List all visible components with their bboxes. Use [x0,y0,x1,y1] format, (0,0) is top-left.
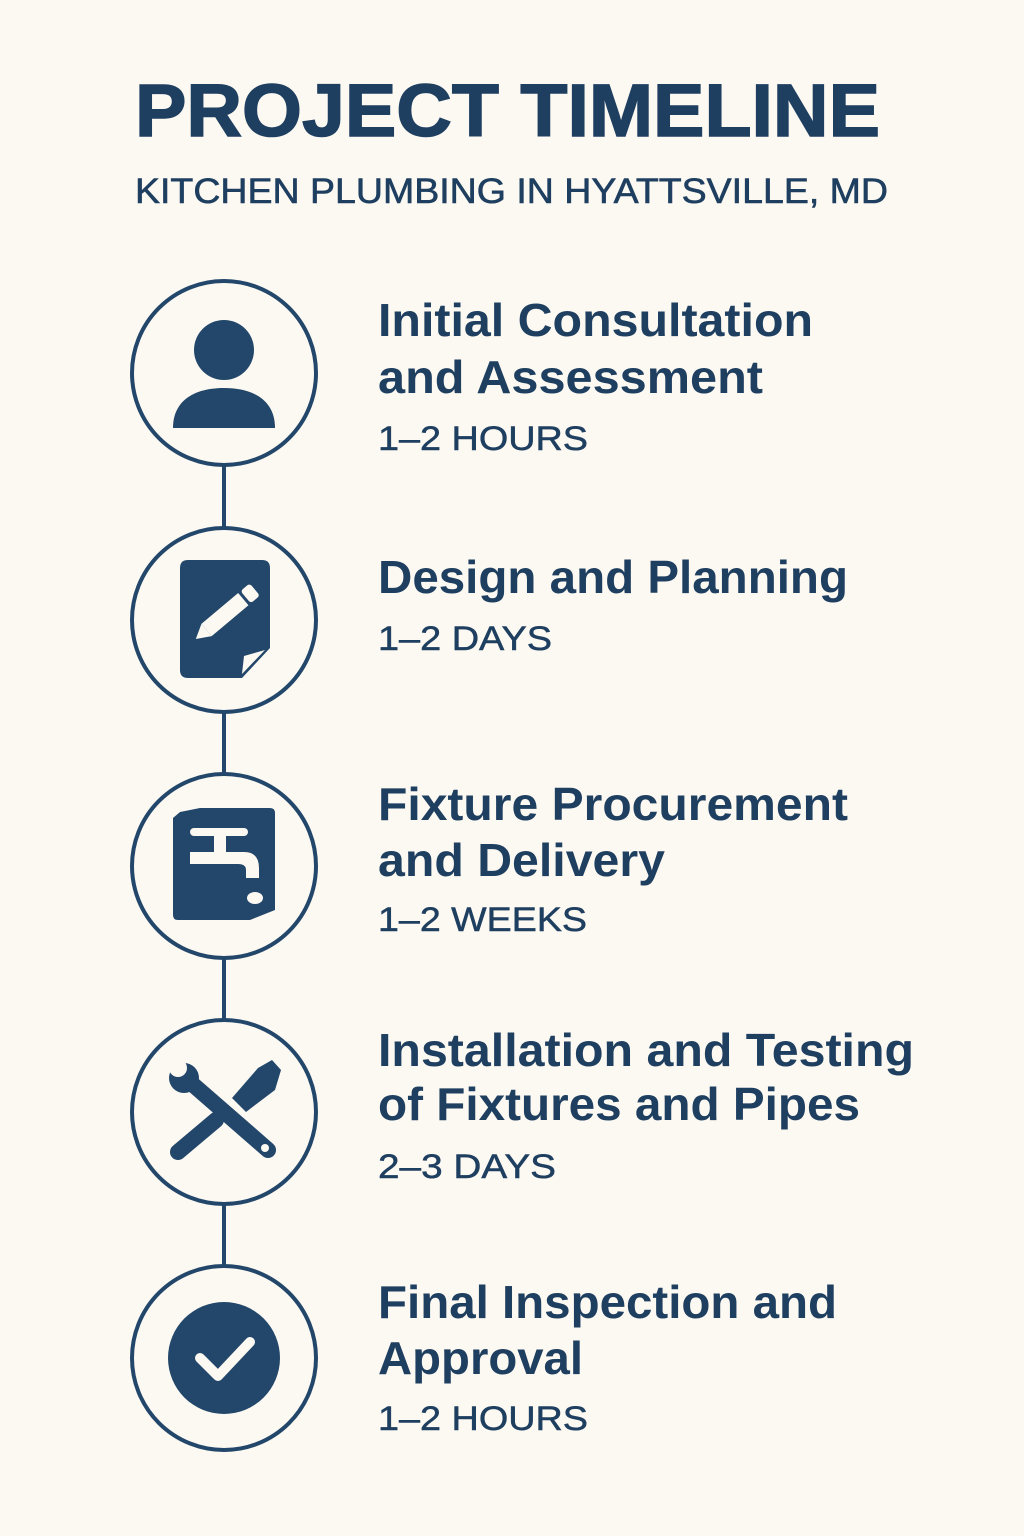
step 2 [132,528,848,712]
icon: wrench and spatula [132,1020,316,1204]
heading: step 1: and Assessment [378,351,763,403]
icon: checkmark [132,1266,316,1450]
icon: faucet document [132,774,316,958]
duration: step 5: 1–2 HOURS [378,1400,588,1438]
heading: step 4: of Fixtures and Pipes [378,1078,860,1130]
heading: step 5 [378,1276,837,1384]
icon: person [132,281,316,465]
duration: step 1: 1–2 HOURS [378,420,588,458]
step 4 [132,1020,914,1204]
heading: step 4: Installation and Testing [378,1024,914,1076]
heading: step 1 [378,294,813,403]
heading: step 4 [378,1024,914,1130]
heading: step 2: Design and Planning [378,551,848,603]
step 1 [132,281,813,465]
heading: step 3: Fixture Procurement [378,778,848,830]
icon: document with pencil [132,528,316,712]
duration: step 4: 2–3 DAYS [378,1148,556,1186]
heading: step 1: Initial Consultation [378,294,813,346]
step 3 [132,774,848,958]
subtitle: KITCHEN PLUMBING IN HYATTSVILLE, MD [135,172,888,211]
step 5 [132,1266,837,1450]
heading: step 5: Approval [378,1332,583,1384]
duration: step 3: 1–2 WEEKS [378,901,587,939]
heading: step 3: and Delivery [378,834,665,886]
heading: step 3 [378,778,848,886]
heading: step 5: Final Inspection and [378,1276,837,1328]
title: PROJECT TIMELINE [135,69,880,152]
timeline connector [222,465,226,1266]
duration: step 2: 1–2 DAYS [378,620,552,658]
